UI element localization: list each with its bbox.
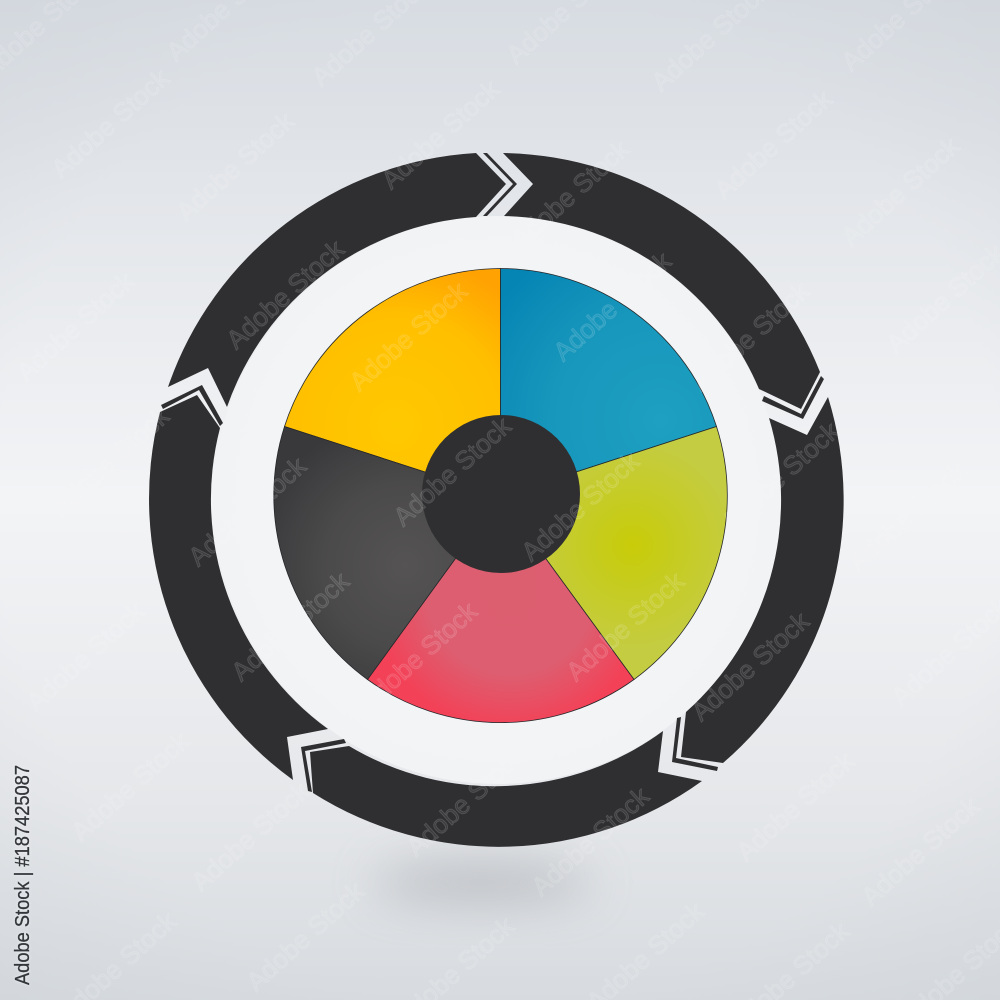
stock watermark pattern: Adobe Stock: [730, 745, 861, 867]
wedge: dark grey: [274, 426, 500, 680]
stock watermark pattern: Adobe Stock: [45, 62, 176, 184]
arrow segment: bottom: [310, 731, 702, 847]
wedge: orange: [284, 268, 500, 496]
stock watermark pattern: Adobe Stock: [353, 595, 484, 717]
thin chevron: right: [762, 376, 824, 419]
stock watermark pattern: Adobe Stock: [400, 740, 531, 862]
drop shadow under the ring: [372, 866, 592, 898]
thin chevron: lower right: [672, 717, 718, 771]
stock watermark pattern: Adobe Stock: [220, 233, 351, 355]
wedge: red: [368, 496, 634, 723]
thin chevron: left: [161, 385, 223, 426]
stock watermark pattern: Adobe Stock: [387, 410, 518, 532]
stock watermark pattern: Adobe Stock: [560, 565, 691, 687]
stock watermark pattern: Adobe Stock: [708, 83, 839, 205]
stock watermark pattern: Adobe Stock: [547, 245, 678, 367]
stock watermark pattern: Adobe Stock: [842, 455, 973, 577]
stock watermark pattern: Adobe Stock: [65, 725, 196, 847]
stock watermark pattern: Adobe Stock: [855, 790, 986, 912]
stock watermark pattern: Adobe Stock: [525, 780, 656, 902]
stock watermark pattern: Adobe Stock: [375, 73, 506, 195]
stock watermark pattern: Adobe Stock: [505, 133, 636, 255]
centre hub circle: [422, 415, 580, 573]
stock watermark pattern: Adobe Stock: [515, 445, 646, 567]
inner light disc: [213, 216, 781, 784]
vertical stock id caption: Adobe Stock | #187425087: [12, 765, 34, 985]
stock watermark pattern: Adobe Stock: [10, 265, 141, 387]
vertical stock id caption: Adobe Stock | #187425087: [12, 765, 34, 985]
wedge: blue: [500, 268, 716, 496]
stock watermark pattern: Adobe Stock: [685, 275, 816, 397]
arrow segment: upper left: [168, 153, 506, 407]
stock watermark pattern: Adobe Stock: [240, 875, 371, 997]
stock watermark pattern: Adobe Stock: [20, 595, 151, 717]
thin chevron: top: [483, 153, 517, 216]
arrow segment: top right: [503, 153, 820, 409]
stock watermark pattern: Adobe Stock: [170, 105, 301, 227]
wedge: green: [500, 426, 727, 680]
stock watermark pattern: Adobe Stock: [343, 275, 474, 397]
arrow segment: right: [681, 397, 844, 763]
stock watermark pattern: Adobe Stock: [225, 565, 356, 687]
stock watermark pattern: Adobe Stock: [45, 400, 176, 522]
arrow segment: lower left: [149, 395, 328, 780]
stock watermark pattern: Adobe Stock: [685, 605, 816, 727]
stock watermark pattern: Adobe Stock: [715, 415, 846, 537]
pie chart with five wedges: [274, 268, 727, 723]
stock watermark pattern: Adobe Stock: [185, 775, 316, 897]
stock watermark pattern: Adobe Stock: [182, 450, 313, 572]
stock watermark pattern: Adobe Stock: [835, 130, 966, 252]
thin chevron: lower left: [301, 739, 346, 792]
outer cycle ring of five arrows: [149, 153, 844, 847]
